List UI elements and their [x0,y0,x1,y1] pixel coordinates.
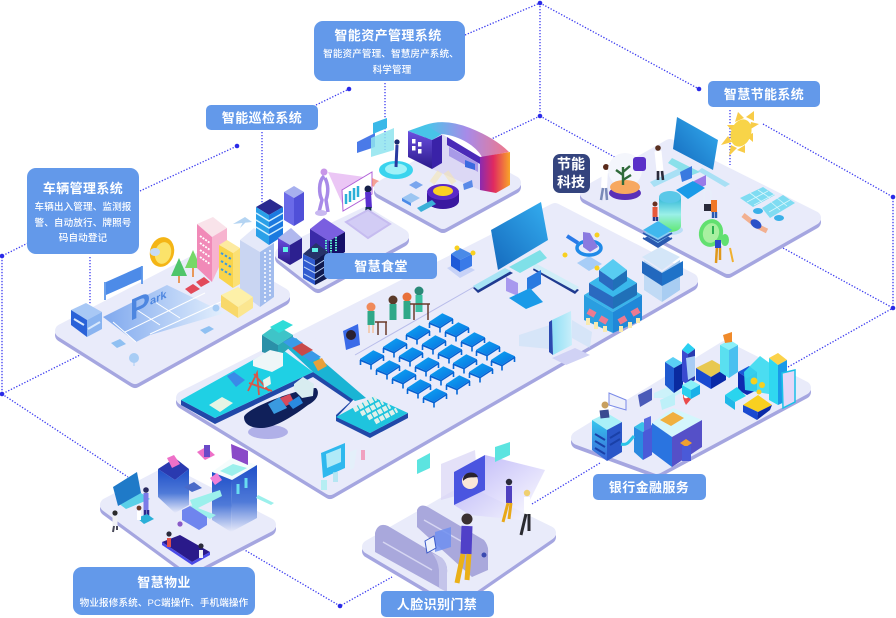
energy science sticker: 节能 [557,156,585,172]
sunbather [743,215,767,231]
towers [197,217,274,318]
heading: vehicle management system: 车辆管理系统 [43,181,123,196]
server tower [592,413,622,461]
crates [402,180,473,212]
data panels [357,118,394,157]
data tower [642,221,683,302]
heading: smart inspection system: 智能巡检系统 [222,110,302,126]
clerk [602,393,626,418]
panel: inspection platform [256,168,402,286]
parking lot: P [130,285,150,328]
panel: bank platform [578,332,804,471]
scientist [601,164,609,200]
coin rack [638,385,682,410]
blue towers [665,332,795,420]
laptop wall [113,472,150,509]
small purple block [278,228,302,265]
canteen divider line [355,272,500,355]
floor tile [346,210,390,238]
gold treasure [427,172,459,209]
office block [71,303,102,337]
lounge sofa [162,506,210,565]
right block [212,444,257,532]
canteen figures [366,286,430,335]
floating tiles [190,445,274,519]
info screen [321,443,365,490]
heading: bank finance services [593,474,706,500]
heading: vehicle management system: 码自动登记 [59,232,108,244]
panel: asset platform [357,118,514,226]
cargo ship [244,377,318,439]
heading: smart energy system: 智慧节能系统 [724,87,804,102]
energy science sticker [553,154,590,193]
standing person [137,487,154,524]
heading: smart inspection system [206,105,318,130]
panel: vehicle management platform [62,217,283,381]
holographic chart [328,172,389,211]
presenter [655,145,663,180]
data cube [447,246,476,278]
red cars [185,277,210,294]
solar panels [740,187,795,221]
canteen tables [360,313,515,408]
access gate [519,311,592,365]
panel: face recognition platform [369,442,549,602]
worker beside cylinder [652,202,658,221]
server stack [303,243,328,285]
main visitor [457,514,472,583]
airplane [233,217,252,228]
heading: vehicle management system [27,168,139,254]
purple hall [408,122,509,190]
battery cylinder [657,191,683,235]
electrician [704,190,716,218]
dark purple block [310,218,345,262]
trucks and crane [209,350,283,412]
cargo port [181,338,408,438]
heading: smart asset system: 智能资产管理、智慧房产系统、 [323,48,459,60]
sun ornament [147,234,177,270]
robot [315,168,328,216]
back gate [417,506,488,577]
heading: vehicle management system: 车辆出入管理、监测报 [35,201,132,213]
energy science sticker: 科技 [557,174,585,190]
heading: smart property [73,567,255,615]
panel: main park platform [181,202,691,492]
heading: smart asset system: 智能资产管理系统 [334,28,442,43]
trees [171,250,201,283]
monitor [650,117,730,199]
logistics block [652,390,702,467]
heading: face access: 人脸识别门禁 [397,597,477,612]
plant dome [608,153,646,200]
heading: smart energy system [708,81,820,107]
heading: smart property: 物业报修系统、PC端操作、手机端操作 [80,597,249,609]
purple tower [284,186,304,226]
heading: smart canteen [324,253,437,279]
left block [158,455,189,513]
heading: smart asset system: 科学管理 [373,64,412,76]
heading: smart canteen: 智慧食堂 [354,259,408,274]
visitor two [503,479,512,522]
light beam [454,455,545,520]
train [283,337,327,371]
front gate [375,525,451,592]
visitor three [521,490,530,535]
hologram podium [379,139,413,179]
dark kiosk [343,324,360,350]
parking lot: ark [150,289,167,308]
car park sign [105,266,142,300]
connector block [621,416,652,460]
small cars [111,304,220,366]
heading: bank finance services: 银行金融服务 [609,480,689,495]
heading: vehicle management system: 警、自动放行、牌照号 [35,217,131,229]
computer [473,202,579,309]
floating tiles [417,442,510,474]
sofa people [166,521,204,558]
analyst [357,186,372,229]
hall wing [480,152,510,193]
warehouse [262,320,293,357]
small kiosk [680,439,692,461]
sun [721,111,759,156]
panel: property platform [107,444,274,570]
face scan panel [441,450,485,505]
power button [696,216,733,263]
panel: energy platform [553,111,814,271]
striped building [256,199,283,245]
magnifier [562,232,602,271]
table laptop [184,482,202,492]
seated figures [112,506,141,532]
heading: face access [381,591,494,617]
parking lot [103,285,225,342]
shop [584,259,642,333]
heading: smart asset system [314,21,465,81]
heading: smart property: 智慧物业 [137,575,191,590]
